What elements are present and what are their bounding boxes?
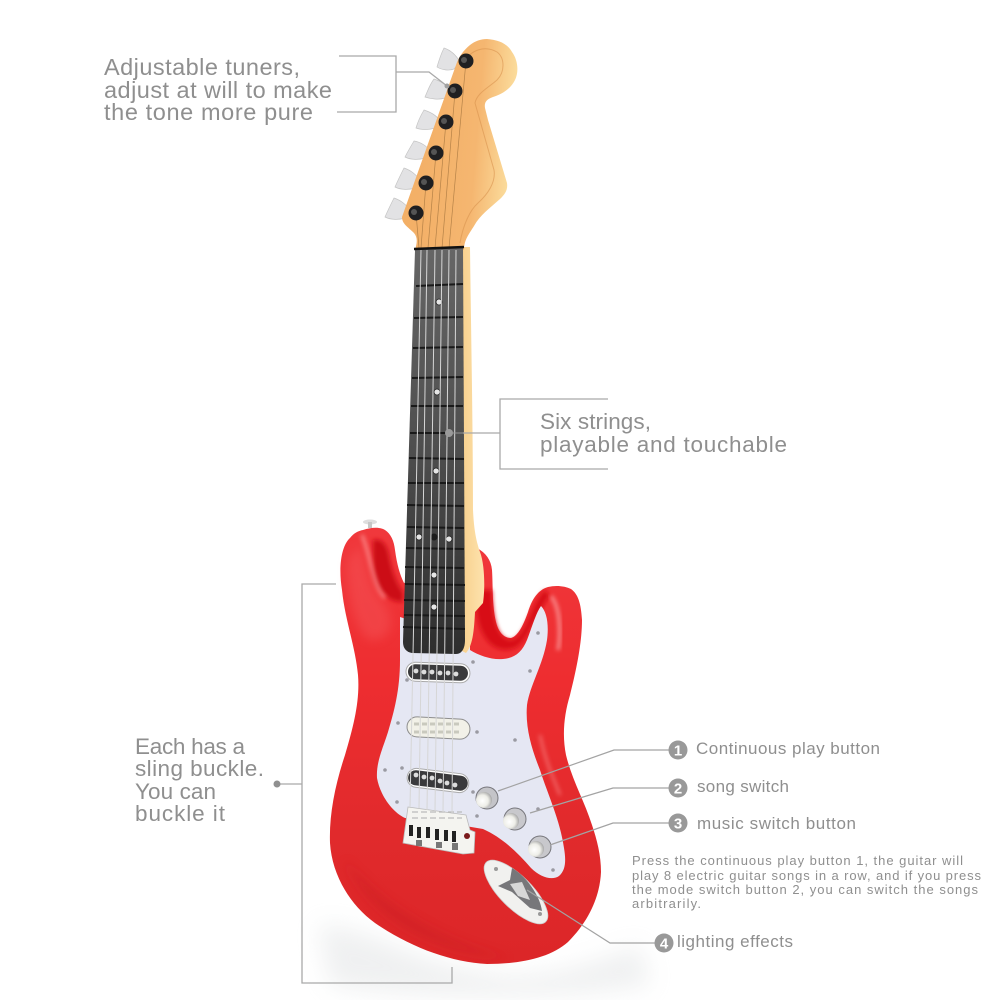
callout 3: music switch button: 3 [674, 816, 682, 832]
heading: tuners: adjust at will to make [104, 77, 332, 103]
pickguard screws [383, 631, 555, 872]
strap button [363, 520, 377, 528]
callout 4: lighting effects: lighting effects [677, 932, 793, 951]
black tuner knobs [408, 54, 474, 220]
callout 3: music switch button [550, 814, 856, 845]
frets [403, 284, 465, 629]
description text: Press the continuous play button 1, the guitar will [632, 853, 963, 868]
callout 3: music switch button: music switch button [697, 814, 856, 833]
heading: strings: Six strings, [540, 409, 651, 434]
lighting plate [475, 851, 557, 933]
heading: tuners [104, 54, 332, 125]
callout lines: sling buckle [277, 584, 452, 983]
guitar body [330, 528, 601, 964]
heading: sling buckle: sling buckle. [135, 756, 264, 781]
guitar [330, 39, 601, 964]
pickup 1 [406, 662, 470, 683]
callout dot: tuners [444, 84, 450, 88]
pickup 3 [406, 767, 470, 794]
heading: sling buckle: Each has a [135, 734, 245, 759]
heading: sling buckle [135, 734, 264, 826]
pickguard [377, 606, 565, 878]
pickup 2 [407, 716, 470, 740]
callout 1: continuous play button: Continuous play button [696, 739, 880, 758]
description text: the mode switch button 2, you can switch the songs [632, 882, 978, 897]
callout dot: sling buckle [274, 780, 280, 788]
white tuner pegs [385, 48, 460, 219]
neck [460, 247, 484, 653]
heading: sling buckle: You can [135, 779, 216, 804]
callout 2: song switch: 2 [674, 780, 682, 798]
callout 1: continuous play button [498, 739, 880, 791]
strings [410, 250, 456, 814]
fretboard [403, 247, 465, 654]
bridge [403, 807, 475, 854]
callout lines: strings [449, 399, 608, 469]
guitar shadow [318, 925, 650, 996]
fret dots [416, 299, 452, 610]
description text: arbitrarily. [632, 896, 701, 911]
headstock [402, 39, 517, 250]
callout 2: song switch: song switch [697, 777, 789, 796]
description text: play 8 electric guitar songs in a row, and if you press [632, 868, 982, 883]
callout 1: continuous play button: 1 [674, 742, 682, 760]
heading: strings [540, 409, 787, 457]
heading: sling buckle: buckle it [135, 801, 226, 826]
knob 2 [503, 808, 526, 830]
callout lines: tuners [337, 56, 447, 112]
heading: strings: playable and touchable [540, 432, 787, 457]
body shading [345, 535, 560, 958]
knob 1 [476, 787, 498, 809]
description text [632, 853, 982, 911]
heading: tuners: the tone more pure [104, 99, 313, 125]
heading: tuners: Adjustable tuners, [104, 54, 300, 80]
callout 4: lighting effects [527, 890, 793, 952]
callout dot: strings [445, 429, 453, 437]
knob 3 [528, 836, 551, 858]
callout 2: song switch [530, 777, 789, 813]
nut [414, 247, 464, 249]
callout 4: lighting effects: 4 [660, 936, 669, 952]
